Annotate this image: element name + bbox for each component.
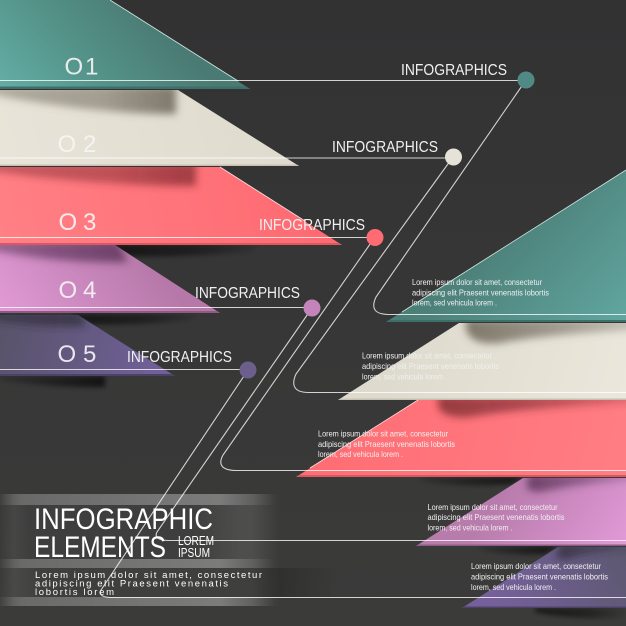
text block 4: Lorem ipsum dolor sit amet, consectetur [428,502,558,512]
text block 5: adipiscing elit Praesent venenatis lobortis [471,572,608,582]
shadows on dark background [0,244,626,618]
title description: adipiscing elit Praesent venenatis [35,578,228,590]
text block 1: adipiscing elit Praesent venenatis lobortis [412,288,549,298]
step labels: INFOGRAPHICS [195,285,300,302]
text block 2: Lorem ipsum dolor sit amet, consectetur [362,350,492,360]
step numbers: O [58,131,76,158]
text block 5: lorem, sed vehicula lorem . [471,582,556,592]
text block 2: lorem, sed vehicula lorem . [362,372,447,382]
text block 4: lorem, sed vehicula lorem . [428,522,512,532]
panel: band 1 teal [0,0,250,89]
node dots [240,72,534,378]
step numbers: 1 [85,54,98,80]
step labels: INFOGRAPHICS [127,349,232,366]
step labels: INFOGRAPHICS [332,139,438,156]
step numbers: 2 [83,131,96,158]
text block 4 [428,502,564,532]
text block 1: Lorem ipsum dolor sit amet, consectetur [412,277,542,287]
step numbers: O [58,209,77,236]
step labels: INFOGRAPHICS [401,62,507,79]
title [34,503,214,564]
step numbers: O [58,341,76,368]
text block 3 [318,428,455,459]
text block 2 [362,350,499,382]
title: LOREM [178,534,214,548]
step numbers: O [58,277,77,304]
step labels [127,62,507,366]
text block 3: lorem, sed vehicula lorem . [318,449,403,459]
panel: right band teal [386,170,626,322]
title description [35,570,262,598]
title description: Lorem ipsum dolor sit amet, consectetur [35,570,262,581]
title: INFOGRAPHIC [34,503,213,536]
panel: right band purple [416,474,626,546]
step numbers: O [64,54,83,80]
step numbers: 4 [83,277,96,304]
panel: right band beige [338,319,626,400]
panel: band 2 beige [0,86,299,166]
text block 2: adipiscing elit Praesent venenatis lobortis [362,361,499,371]
text block 4: adipiscing elit Praesent venenatis lobortis [428,512,564,522]
text block 5: Lorem ipsum dolor sit amet, consectetur [471,561,601,571]
panel: band 4 purple [0,241,220,313]
text block 3: adipiscing elit Praesent venenatis lobortis [318,439,455,449]
step numbers: 3 [83,209,96,236]
text block 1: lorem, sed vehicula lorem . [412,298,497,308]
title: ELEMENTS [34,531,166,564]
title description: lobortis lorem [35,587,114,598]
panel: right band violet [462,543,626,608]
text block 3: Lorem ipsum dolor sit amet, consectetur [318,428,448,438]
title: IPSUM [178,546,210,560]
step numbers: 5 [83,341,96,368]
panel: band 5 violet [0,311,175,376]
text block 5 [471,561,608,592]
step numbers [58,54,98,368]
title panel backdrop [0,494,340,606]
panel: band 3 red [0,163,342,245]
panel: right band red [296,396,626,477]
text block 1 [412,277,549,308]
step labels: INFOGRAPHICS [259,217,365,234]
